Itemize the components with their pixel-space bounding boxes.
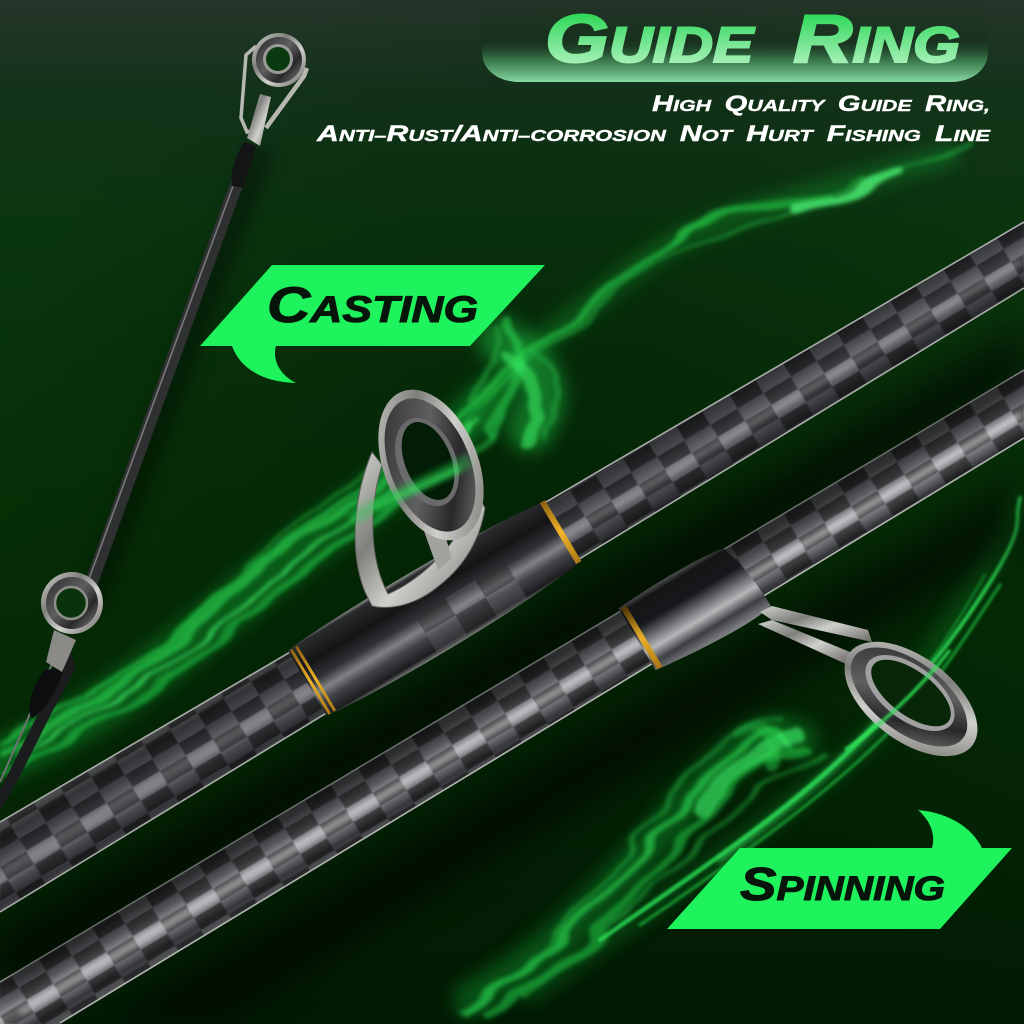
label: Casting: CASTING — [267, 277, 478, 333]
gold rings: casting — [290, 498, 582, 715]
gold ring: spinning — [621, 605, 662, 669]
banner pill — [482, 0, 988, 82]
subtitle: H IGH Q UALITY G UIDE R ING, — [652, 91, 990, 116]
sleeve: casting guide wrap — [286, 495, 585, 721]
label: Spinning: SPINNING — [740, 858, 945, 910]
second small guide — [41, 572, 103, 672]
title banner — [482, 0, 988, 82]
subtitle: A NTI– R UST /A NTI–CORROSION N OT H URT F ISHING L INE — [316, 121, 992, 146]
green smoke swoosh: lower — [465, 498, 1020, 1012]
subtitle — [316, 91, 992, 146]
title: Guide Ring: GUIDE R ING — [545, 1, 960, 77]
callout: Spinning — [667, 810, 1012, 929]
large spinning guide — [758, 606, 998, 779]
spinning rod — [0, 370, 1024, 1024]
large casting guide — [350, 374, 504, 607]
casting rod tip section — [0, 150, 262, 812]
green smoke swoosh: upper — [0, 148, 975, 775]
tip guide — [232, 33, 307, 188]
callout: Casting — [200, 265, 545, 383]
casting rod — [0, 222, 1024, 995]
sleeve: spinning guide wrap — [617, 539, 772, 676]
